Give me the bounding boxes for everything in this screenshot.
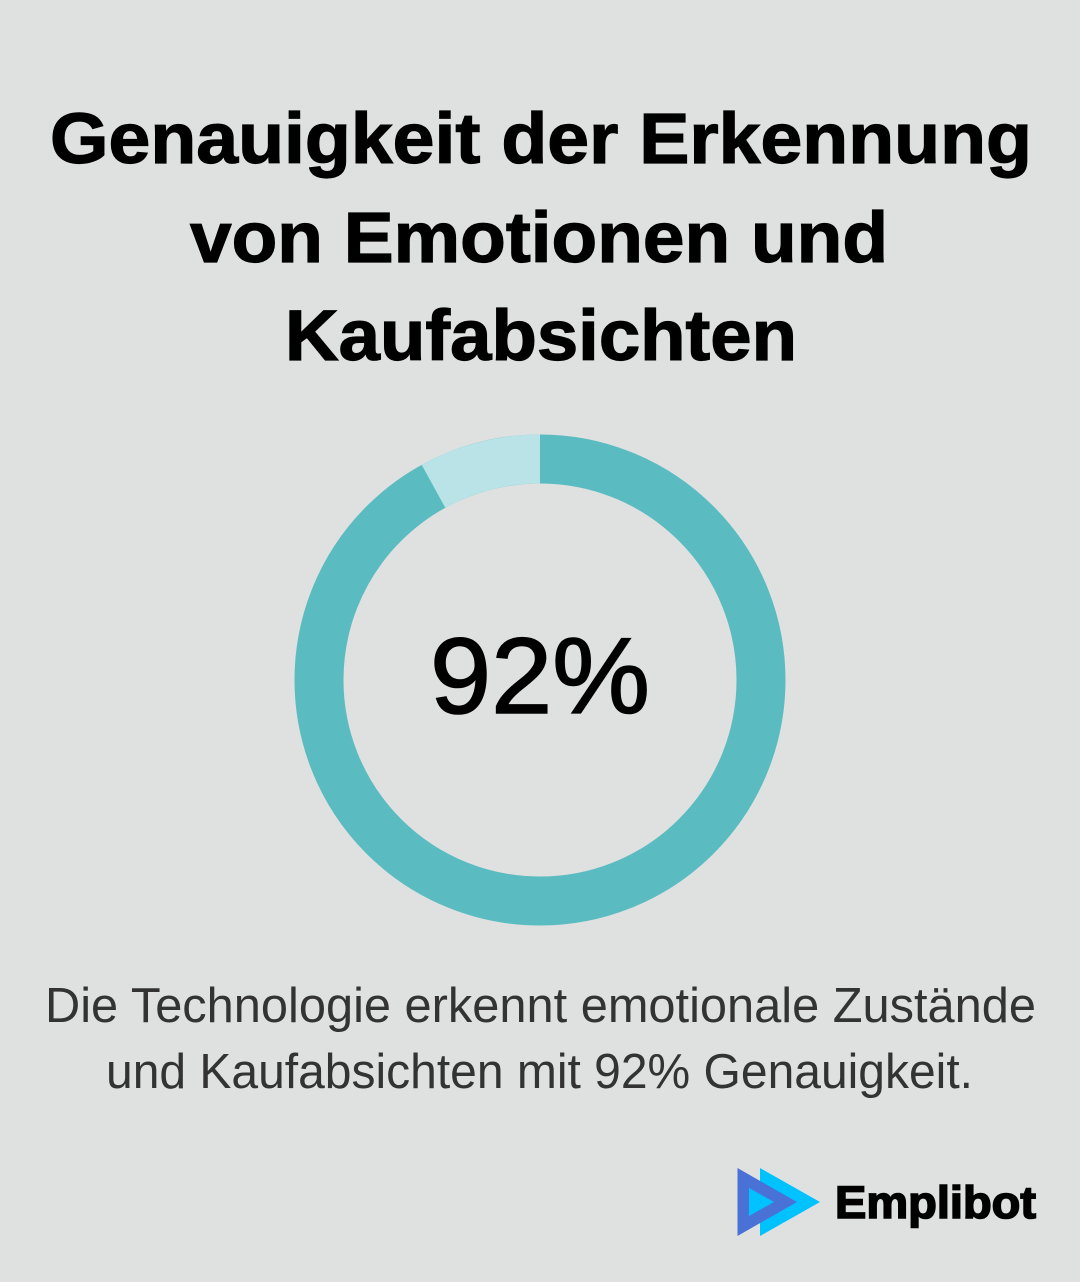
title: von Emotionen und (190, 199, 888, 278)
description text: und Kaufabsichten mit 92% Genauigkeit. (106, 1045, 973, 1099)
title (50, 100, 1032, 376)
logo wordmark: Emplibot (835, 1177, 1036, 1228)
title: Genauigkeit der Erkennung (50, 100, 1032, 179)
icon: play triangles (738, 1168, 820, 1236)
description text: Die Technologie erkennt emotionale Zustände (45, 979, 1036, 1033)
donut value: 92% (430, 615, 650, 736)
logo: Emplibot (738, 1168, 1036, 1236)
description text (45, 979, 1036, 1099)
title: Kaufabsichten (285, 297, 797, 376)
donut chart: 92% (319, 459, 761, 901)
